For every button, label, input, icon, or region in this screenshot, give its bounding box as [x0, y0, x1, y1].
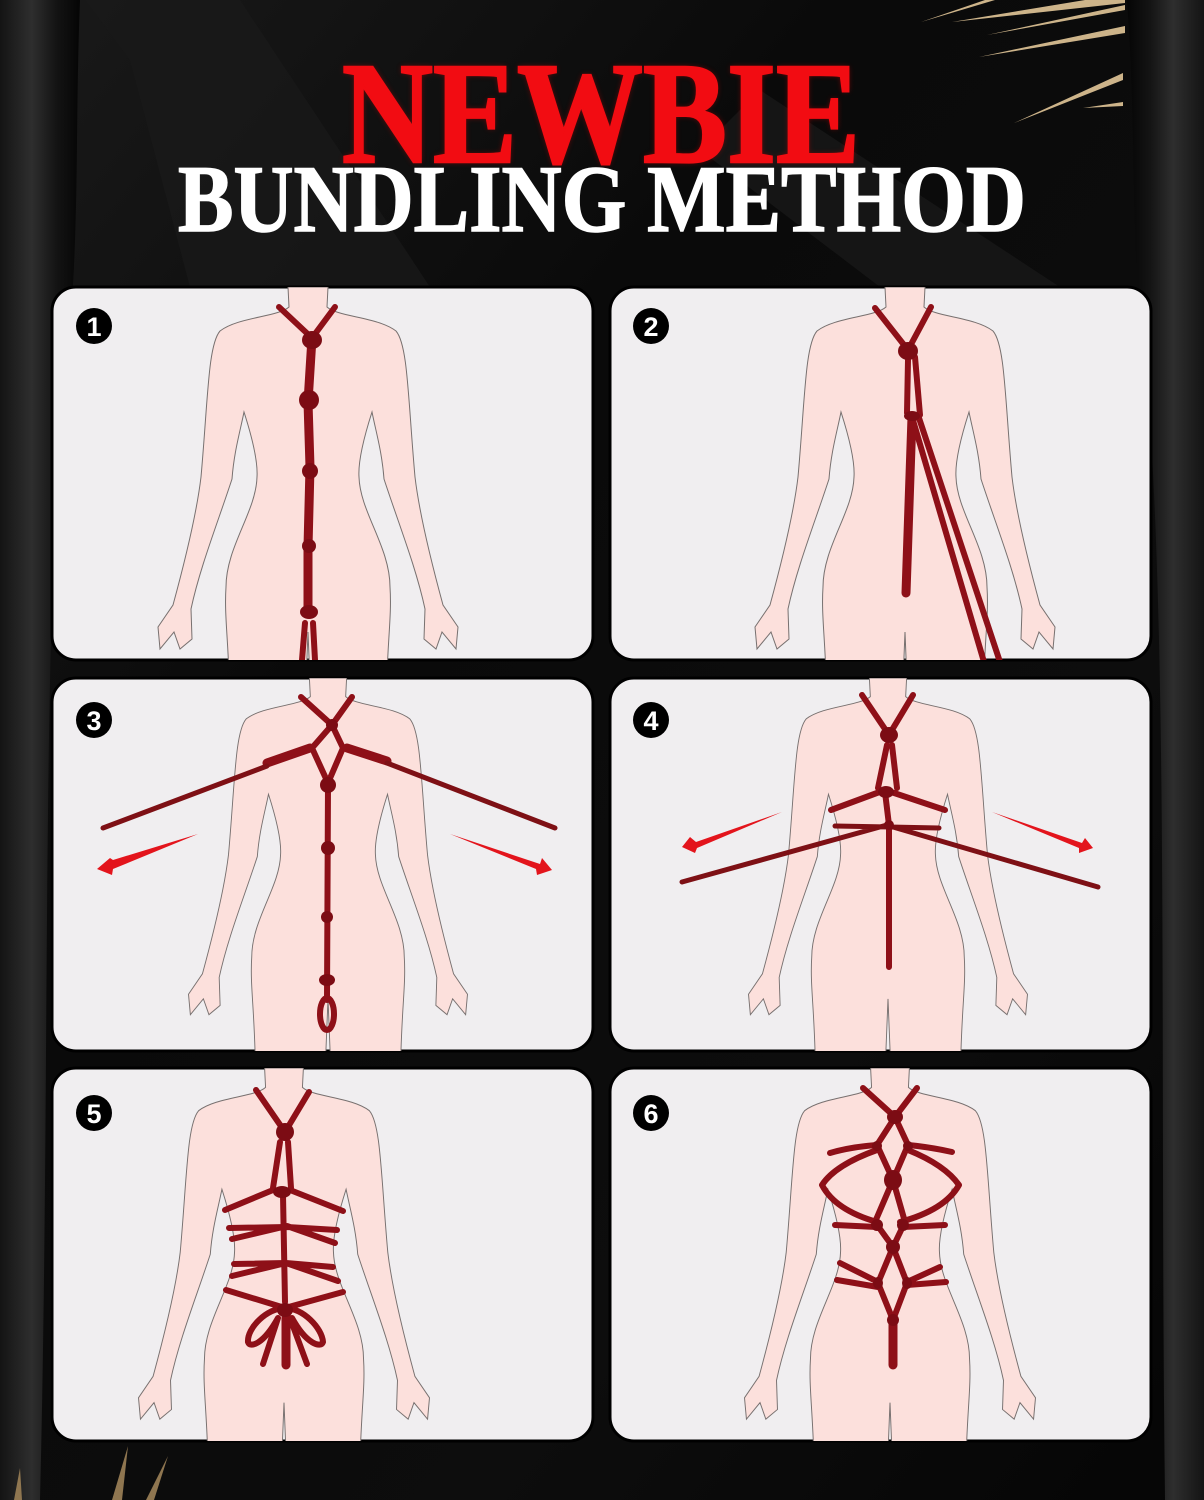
panel 5 [52, 1068, 593, 1475]
title [178, 34, 1026, 252]
panel 4 rope [682, 695, 1098, 967]
badge 6 [633, 1095, 669, 1131]
panel 3 figure [188, 678, 467, 1069]
panel 4 card [610, 678, 1151, 1051]
panel 1 rope [279, 307, 335, 660]
arrow right [450, 834, 552, 875]
satin folds [85, 0, 1060, 287]
badge 5: 5 [86, 1099, 102, 1129]
badge 2 [633, 308, 669, 344]
decoration: gold feather top right [921, 0, 1125, 123]
decoration: gold feather bottom left [14, 1446, 168, 1500]
panel 1 [52, 287, 593, 707]
panel 5 rope [225, 1090, 343, 1365]
panel 5 figure [138, 1068, 430, 1475]
panel 2 figure [754, 287, 1056, 660]
title glow: NEWBIE [342, 34, 860, 194]
panel 2 [610, 287, 1151, 707]
badge 3: 3 [86, 706, 102, 736]
right curtain [1127, 0, 1204, 1500]
panel 1 card [52, 287, 593, 660]
badge 1 [76, 308, 112, 344]
title line: bundling method: BUNDLING METHOD [178, 146, 1026, 252]
panel 2 card [610, 287, 1151, 660]
title line: newbie: NEWBIE [342, 34, 860, 194]
panel 3 rope [103, 697, 555, 1030]
panel 3 [52, 678, 593, 1069]
panel 6 rope [822, 1088, 959, 1365]
arrow left [97, 834, 198, 875]
panel 1 figure [158, 287, 458, 660]
panel 6 card [610, 1068, 1151, 1441]
panel 5 card [52, 1068, 593, 1441]
badge 2: 2 [643, 312, 659, 342]
badge 6: 6 [643, 1099, 659, 1129]
panel 4 figure [748, 678, 1028, 1069]
panel 6 figure [744, 1068, 1036, 1475]
badge 4 [633, 702, 669, 738]
arrow right [992, 812, 1093, 853]
panel 3 card [52, 678, 593, 1051]
badge 1: 1 [86, 312, 102, 342]
badge 3 [76, 702, 112, 738]
panel 4 [610, 678, 1151, 1069]
arrow left [682, 812, 782, 853]
panel 2 rope [875, 307, 1000, 662]
badge 5 [76, 1095, 112, 1131]
panel 6 [610, 1068, 1151, 1475]
left curtain [0, 0, 80, 1500]
badge 4: 4 [643, 706, 659, 736]
